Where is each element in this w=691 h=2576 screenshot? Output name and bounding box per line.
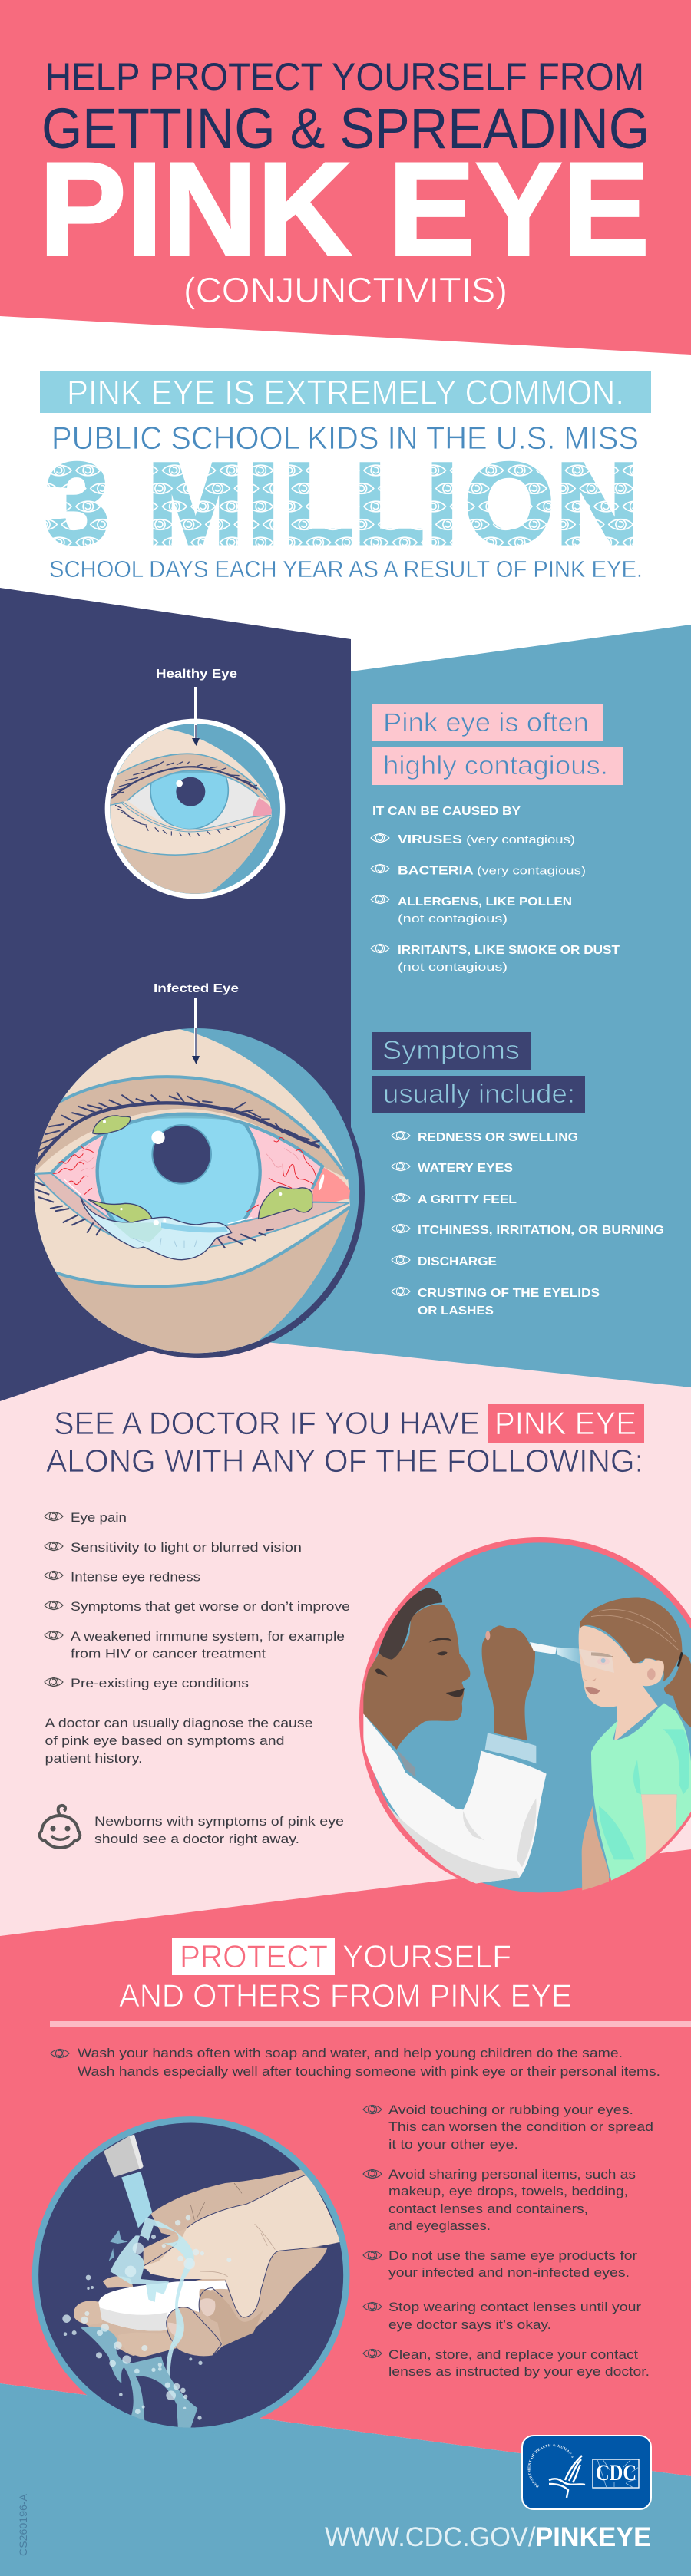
icon: eye xyxy=(45,1601,63,1610)
beam on face xyxy=(578,1648,614,1673)
discharge xyxy=(81,1197,232,1260)
icon: eye xyxy=(45,1571,63,1580)
label: infected eye: Infected Eye xyxy=(154,982,239,995)
wash text: Wash your hands often with soap and water, and help young children do the same. xyxy=(78,2046,623,2060)
tip 4 xyxy=(388,2300,641,2332)
item: Sensitivity to light or blurred vision xyxy=(71,1540,302,1555)
highlight text: PINK EYE xyxy=(494,1405,636,1441)
heading line 1: YOURSELF xyxy=(342,1938,511,1974)
symptom: DISCHARGE xyxy=(418,1255,497,1268)
lower fingers xyxy=(74,2301,177,2357)
item: Symptoms that get worse or don’t improve xyxy=(71,1599,350,1614)
highlight box xyxy=(488,1404,644,1443)
note: irritants: (not contagious) xyxy=(398,961,508,974)
faucet xyxy=(104,2136,143,2177)
red veins xyxy=(51,1137,316,1212)
panel: header background xyxy=(0,0,691,355)
illustration: infected eye xyxy=(23,1021,365,1361)
thumb xyxy=(199,2289,263,2346)
tip 5: Clean, store, and replace your contact xyxy=(388,2347,638,2362)
icon: eye xyxy=(51,2049,69,2058)
note: allergens: (not contagious) xyxy=(398,912,508,925)
heading text 1: Symptoms xyxy=(382,1036,520,1065)
fingers under stream xyxy=(103,2228,187,2288)
item: Intense eye redness xyxy=(71,1570,200,1584)
icon: eye xyxy=(363,2251,382,2260)
tip 3: Do not use the same eye products for xyxy=(388,2248,637,2263)
cause: viruses: VIRUSES (very contagious) xyxy=(398,833,575,846)
child arm shadow side xyxy=(582,1806,609,1898)
tip 2: contact lenses and containers, xyxy=(388,2202,588,2216)
icon: eye xyxy=(392,1255,410,1265)
heading box 1 xyxy=(372,704,603,741)
arrow: infected eye xyxy=(192,998,200,1064)
text: newborn note: Newborns with symptoms of pink eye xyxy=(94,1814,344,1829)
item: Eye pain xyxy=(71,1510,127,1525)
url: WWW.CDC.GOV/PINKEYE xyxy=(325,2522,651,2552)
list: prevention tips xyxy=(363,2103,653,2379)
tip 1: it to your other eye. xyxy=(388,2137,518,2152)
light hand xyxy=(144,2175,340,2317)
stat follow-on: SCHOOL DAYS EACH YEAR AS A RESULT OF PINK EYE. xyxy=(49,556,643,582)
symptom: ITCHINESS, IRRITATION, OR BURNING xyxy=(418,1224,664,1237)
title xyxy=(39,55,650,310)
tip 4: Stop wearing contact lenses until your xyxy=(388,2300,641,2314)
water droplets xyxy=(62,2215,231,2420)
cause: irritants: IRRITANTS, LIKE SMOKE OR DUST xyxy=(398,944,620,957)
eagle xyxy=(549,2456,585,2498)
collar xyxy=(397,1750,416,1778)
icon: eye xyxy=(363,2105,382,2114)
crust: right xyxy=(259,1187,312,1219)
panel: doctor section background xyxy=(0,1304,691,1936)
child features xyxy=(591,1652,614,1657)
heading box 1 xyxy=(372,1032,531,1070)
lower finger xyxy=(167,2307,221,2357)
icon: eye xyxy=(371,944,389,953)
lower hand back xyxy=(74,2243,328,2357)
heading text 1: Pink eye is often xyxy=(383,708,589,737)
title: pink eye: PINK EYE xyxy=(39,134,650,283)
tip 2: Avoid sharing personal items, such as xyxy=(388,2167,636,2182)
doctor hair xyxy=(379,1588,442,1660)
text: diagnosis note: A doctor can usually diagnose the cause xyxy=(45,1716,313,1730)
panel: bottom background xyxy=(0,2383,691,2576)
symptom: REDNESS OR SWELLING xyxy=(418,1131,578,1144)
text: newborn note xyxy=(94,1814,344,1846)
upper lashes xyxy=(36,1092,320,1164)
crust: lower left xyxy=(88,1199,152,1222)
illustration: healthy eye xyxy=(100,714,285,905)
heading box 2 xyxy=(372,1076,585,1113)
banner text: PINK EYE IS EXTREMELY COMMON. xyxy=(67,373,624,412)
icon: eye xyxy=(392,1224,410,1233)
child arm xyxy=(641,1794,677,1865)
symptom: A GRITTY FEEL xyxy=(418,1193,517,1206)
lower lid xyxy=(35,1173,349,1251)
icon: eye xyxy=(45,1677,63,1687)
heading: protect xyxy=(119,1938,572,2014)
icon: eye xyxy=(392,1131,410,1140)
tip 5: lenses as instructed by your eye doctor. xyxy=(388,2364,650,2379)
panel: protect section background xyxy=(0,1849,691,2476)
icon: eye xyxy=(363,2169,382,2179)
highlight text: PROTECT xyxy=(180,1938,328,1974)
label: healthy eye: Healthy Eye xyxy=(156,668,237,681)
heading text 2: usually include: xyxy=(383,1080,575,1109)
upper fingers dark xyxy=(151,2169,306,2238)
symptom: CRUSTING OF THE EYELIDS xyxy=(418,1287,600,1300)
doctor neck and face xyxy=(363,1605,470,1750)
lower lashes xyxy=(35,1182,274,1248)
icon: eye xyxy=(371,864,389,873)
soap xyxy=(98,2281,228,2331)
icon: eye xyxy=(392,1162,410,1171)
tip 1: This can worsen the condition or spread xyxy=(388,2119,653,2134)
cause: allergens: ALLERGENS, LIKE POLLEN xyxy=(398,895,572,909)
flashlight xyxy=(530,1642,557,1654)
subtitle: (CONJUNCTIVITIS) xyxy=(183,270,508,310)
lead-in: IT CAN BE CAUSED BY xyxy=(372,805,521,818)
text: newborn note: should see a doctor right away. xyxy=(94,1832,299,1846)
icon: eye xyxy=(363,2302,382,2311)
iris details xyxy=(151,1124,212,1185)
tip 5 xyxy=(388,2347,650,2379)
water runoff xyxy=(81,2327,197,2430)
seal text: DEPARTMENT OF HEALTH & HUMAN SERVICES USA xyxy=(528,2444,574,2488)
heading line 2: ALONG WITH ANY OF THE FOLLOWING: xyxy=(46,1443,643,1479)
illustration: washing hands xyxy=(35,2119,346,2431)
tip 1 xyxy=(388,2103,653,2152)
text: diagnosis note xyxy=(45,1716,313,1766)
icon: eye xyxy=(363,2349,382,2358)
icon: eye xyxy=(45,1542,63,1551)
panel: eye illustrations background xyxy=(0,588,351,1401)
CDC box xyxy=(593,2459,639,2488)
heading box 2 xyxy=(372,747,623,785)
child face xyxy=(579,1625,663,1742)
cause: bacteria: BACTERIA (very contagious) xyxy=(398,864,586,878)
item: Pre-existing eye conditions xyxy=(71,1676,249,1690)
tip 1: Avoid touching or rubbing your eyes. xyxy=(388,2103,633,2117)
cuff xyxy=(485,1733,536,1763)
light beam xyxy=(557,1647,580,1664)
symptom: WATERY EYES xyxy=(418,1162,513,1175)
doctor features xyxy=(375,1638,465,1697)
tip 3 xyxy=(388,2248,637,2280)
icon: eye xyxy=(371,833,389,843)
CDC wordmark: CDC xyxy=(596,2460,636,2485)
heading: see a doctor xyxy=(46,1404,644,1479)
water stream xyxy=(121,2172,152,2228)
highlight box xyxy=(172,1938,335,1975)
icon: eye xyxy=(371,895,389,904)
banner xyxy=(40,371,651,413)
wash text continued: Wash hands especially well after touching someone with pink eye or their personal items. xyxy=(78,2064,660,2079)
list item: wash hands xyxy=(51,2046,660,2079)
illustration: doctor examining child xyxy=(362,1540,691,1898)
title line 1: HELP PROTECT YOURSELF FROM xyxy=(45,55,644,98)
text: diagnosis note: patient history. xyxy=(45,1751,143,1766)
heading text 2: highly contagious. xyxy=(383,751,608,780)
item continued: from HIV or cancer treatment xyxy=(71,1647,266,1661)
doctor hand xyxy=(482,1625,535,1740)
child ponytail xyxy=(664,1654,691,1729)
publication code: CS260196-A xyxy=(18,2494,29,2556)
tip 2 xyxy=(388,2167,636,2233)
tip 4: eye doctor says it’s okay. xyxy=(388,2317,551,2332)
panel: symptoms xyxy=(372,1032,664,1318)
tip 3: your infected and non-infected eyes. xyxy=(388,2265,630,2280)
crust: upper xyxy=(93,1116,131,1134)
caruncle xyxy=(312,1168,350,1207)
list: when to see a doctor xyxy=(45,1510,350,1690)
panel: causes xyxy=(371,704,623,974)
arrow: healthy eye xyxy=(192,687,200,746)
icon: eye xyxy=(45,1631,63,1640)
text: diagnosis note: of pink eye based on symptoms and xyxy=(45,1733,284,1748)
icon: baby xyxy=(40,1806,80,1848)
tip 2: makeup, eye drops, towels, bedding, xyxy=(388,2184,628,2198)
tip 2: and eyeglasses. xyxy=(388,2218,491,2233)
coat xyxy=(363,1713,547,1884)
panel: causes and symptoms background xyxy=(230,625,691,1387)
stat lead-in: PUBLIC SCHOOL KIDS IN THE U.S. MISS xyxy=(51,420,639,456)
big number: 3 MILLION xyxy=(45,439,639,568)
icon: eye xyxy=(392,1193,410,1202)
title line 2: GETTING & SPREADING xyxy=(41,97,650,160)
icon: eye xyxy=(392,1287,410,1296)
symptom continued: OR LASHES xyxy=(418,1304,494,1318)
icon: eye xyxy=(45,1512,63,1521)
heading line 1: SEE A DOCTOR IF YOU HAVE xyxy=(54,1405,480,1441)
statistic block xyxy=(40,371,651,582)
child shirt xyxy=(591,1703,691,1882)
heading line 2: AND OTHERS FROM PINK EYE xyxy=(119,1977,572,2014)
sclera xyxy=(51,1114,322,1245)
child ear xyxy=(650,1661,664,1686)
water splash xyxy=(110,2218,194,2381)
child hair xyxy=(580,1597,682,1682)
item: A weakened immune system, for example xyxy=(71,1629,345,1644)
